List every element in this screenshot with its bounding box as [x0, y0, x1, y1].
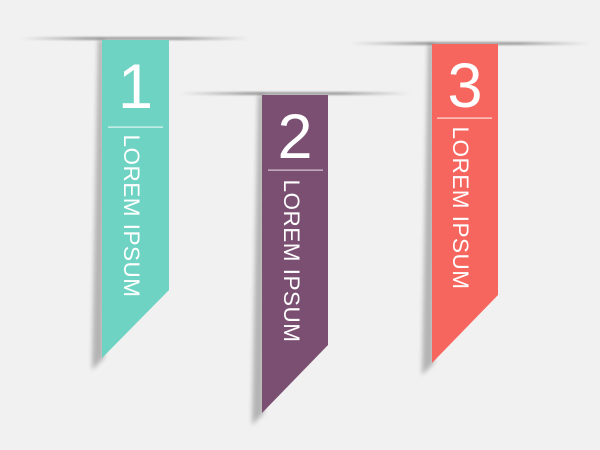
number 2: 2	[277, 102, 313, 172]
number 1: 1	[118, 52, 153, 122]
label 1: LOREM IPSUM	[119, 134, 144, 298]
ribbon 1	[20, 37, 250, 370]
number 3: 3	[447, 51, 483, 121]
ribbon 3	[350, 42, 590, 375]
label 2: LOREM IPSUM	[279, 179, 304, 343]
ribbon 2	[180, 92, 410, 425]
label 3: LOREM IPSUM	[448, 126, 473, 290]
